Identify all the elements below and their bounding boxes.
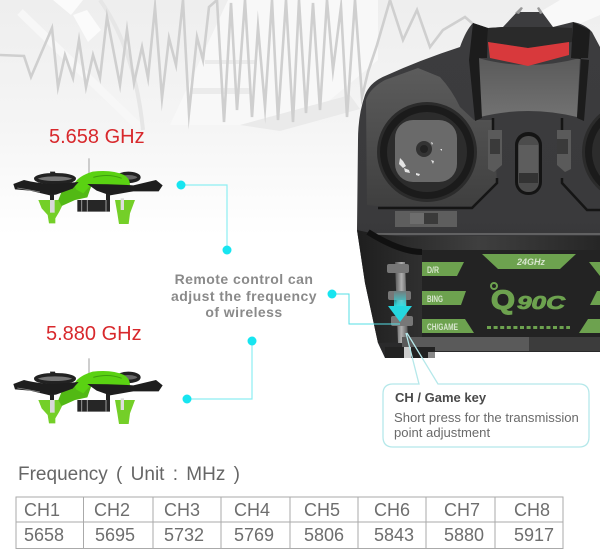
description text: adjust the frequency xyxy=(171,288,317,304)
frequency table: CH7 xyxy=(444,500,480,520)
callout: ch game key xyxy=(383,333,589,447)
screen label: 2.4GHz: 24GHz xyxy=(516,257,546,267)
lower dark band xyxy=(357,230,600,343)
frequency table: 5658 xyxy=(24,525,64,545)
description text: of wireless xyxy=(205,304,283,320)
trim tabs xyxy=(488,130,571,172)
Q90C logo: Q xyxy=(491,285,515,315)
antenna tips xyxy=(515,7,543,14)
power switch xyxy=(395,211,457,227)
frequency table: 5880 xyxy=(444,525,484,545)
frequency table: CH8 xyxy=(514,500,550,520)
controller body xyxy=(357,12,600,358)
frequency table: CH2 xyxy=(94,500,130,520)
lower strip xyxy=(402,337,529,351)
drone 1 xyxy=(13,158,163,224)
Q90C logo xyxy=(491,283,566,315)
top bumper plate xyxy=(478,58,580,117)
callout: ch game key: point adjustment xyxy=(394,425,490,440)
frequency table xyxy=(16,497,563,548)
frequency table: 5806 xyxy=(304,525,344,545)
heading: 5.880 GHz: 5.880 GHz xyxy=(46,323,142,345)
connector: drone 2 xyxy=(182,336,256,404)
screen label: BING: BING xyxy=(427,294,443,304)
screen label: CH/GAME: CH/GAME xyxy=(427,322,458,332)
frequency table: 5843 xyxy=(374,525,414,545)
connector: key dot xyxy=(328,290,400,324)
connector: drone 1 xyxy=(176,180,232,254)
frequency table: 5732 xyxy=(164,525,204,545)
drone 2 xyxy=(13,358,163,424)
frequency table: CH3 xyxy=(164,500,200,520)
body left highlight panel xyxy=(366,68,497,206)
screen label: BING xyxy=(422,291,466,305)
screen label: D/R xyxy=(422,262,464,276)
dashes xyxy=(487,326,570,329)
red trigger xyxy=(488,42,569,66)
frequency heading: Frequency ( Unit : MHz ) xyxy=(18,464,240,485)
frequency table: CH5 xyxy=(304,500,340,520)
frequency table: CH1 xyxy=(24,500,60,520)
centre slider xyxy=(515,132,542,195)
top black band xyxy=(488,27,572,48)
heading: 5.658 GHz: 5.658 GHz xyxy=(49,126,145,148)
screen label: D/R: D/R xyxy=(427,265,439,275)
screen right labels xyxy=(579,262,600,333)
frequency table: CH6 xyxy=(374,500,410,520)
description text xyxy=(171,271,317,320)
callout: ch game key: CH / Game key xyxy=(395,390,487,405)
frequency table: 5917 xyxy=(514,525,554,545)
waveform xyxy=(0,0,480,122)
panel grooves xyxy=(378,118,600,210)
frequency table: 5769 xyxy=(234,525,274,545)
screen label: CH/GAME xyxy=(422,319,474,333)
bumper frame right xyxy=(571,22,590,121)
ch game key xyxy=(387,262,413,343)
Q90C logo: 90C xyxy=(517,293,566,313)
remote controller xyxy=(357,7,600,358)
background: tunnel texture xyxy=(0,0,600,235)
callout: ch game key: Short press for the transmission xyxy=(394,410,579,425)
screen panel xyxy=(422,250,600,337)
left joystick xyxy=(377,102,477,202)
frequency table: 5695 xyxy=(95,525,135,545)
right joystick xyxy=(582,102,600,202)
description text: Remote control can xyxy=(175,271,313,287)
screen label: 2.4GHz xyxy=(482,254,576,269)
cyan arrow on key xyxy=(388,290,412,322)
frequency table: CH4 xyxy=(234,500,270,520)
bumper frame left xyxy=(469,23,488,121)
